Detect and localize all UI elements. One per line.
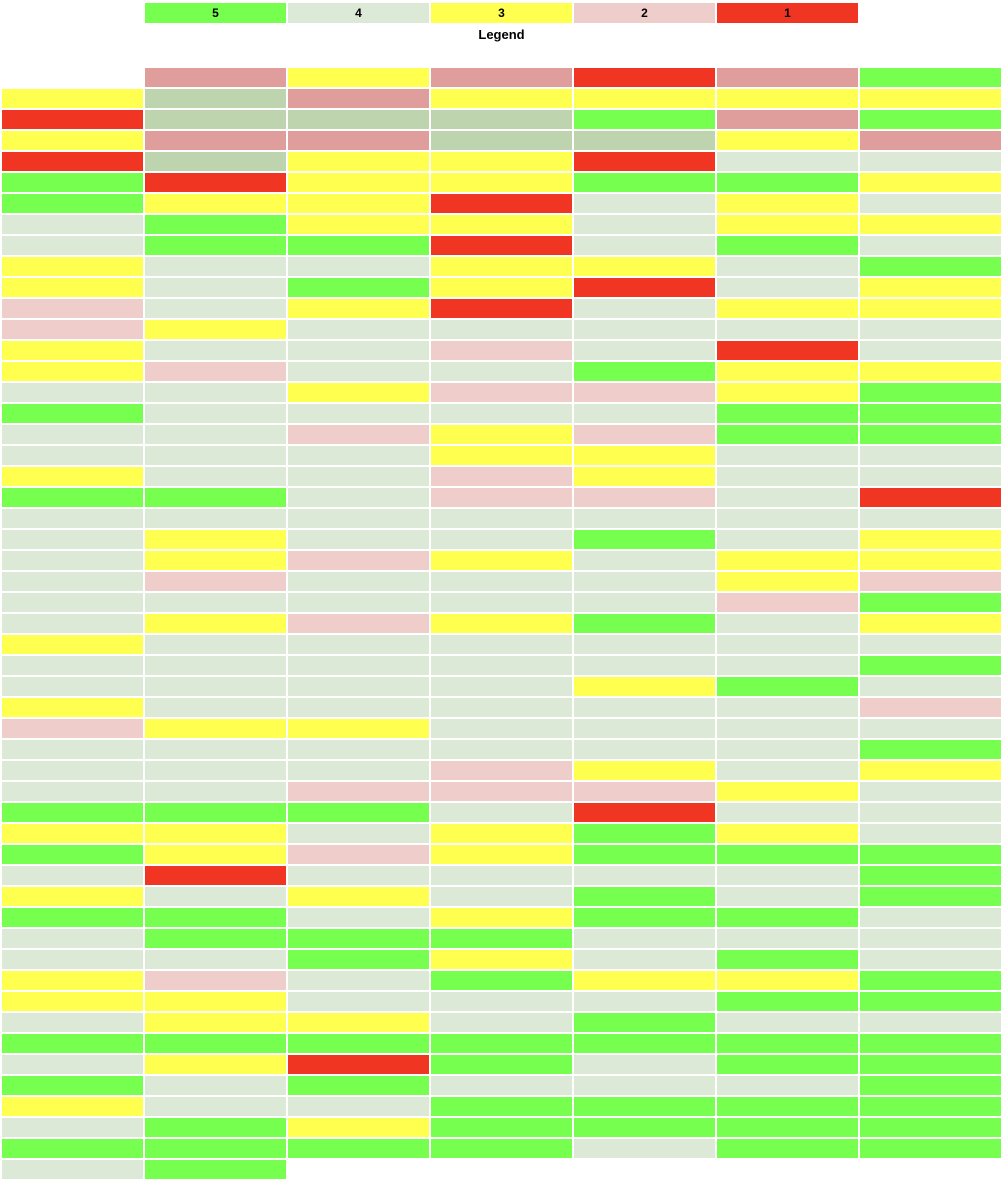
row 6 xyxy=(2,173,1001,192)
row 22 xyxy=(2,509,1001,528)
row 23 xyxy=(2,530,1001,549)
legend swatches 5 to 1 xyxy=(145,3,858,23)
row 30 xyxy=(2,677,1001,696)
row 3 xyxy=(2,110,1001,129)
row 32 xyxy=(2,719,1001,738)
row 50 xyxy=(2,1097,1001,1116)
row 5 xyxy=(2,152,1001,171)
row 35 xyxy=(2,782,1001,801)
row 24 xyxy=(2,551,1001,570)
row 42 xyxy=(2,929,1001,948)
row 16 xyxy=(2,383,1001,402)
row 26 xyxy=(2,593,1001,612)
row 48 xyxy=(2,1055,1001,1074)
row 44 xyxy=(2,971,1001,990)
row 33 xyxy=(2,740,1001,759)
row 25 xyxy=(2,572,1001,591)
row 41 xyxy=(2,908,1001,927)
row 9 xyxy=(2,236,1001,255)
row 15 xyxy=(2,362,1001,381)
row 28 xyxy=(2,635,1001,654)
row 27 xyxy=(2,614,1001,633)
row 45 xyxy=(2,992,1001,1011)
row 47 xyxy=(2,1034,1001,1053)
row 13 xyxy=(2,320,1001,339)
row 17 xyxy=(2,404,1001,423)
row 1 xyxy=(145,68,1001,87)
row 53 xyxy=(2,1160,286,1179)
row 2 xyxy=(2,89,1001,108)
row 14 xyxy=(2,341,1001,360)
row 7 xyxy=(2,194,1001,213)
row 38 xyxy=(2,845,1001,864)
legend swatches 5 to 1: 5 xyxy=(212,6,219,20)
row 12 xyxy=(2,299,1001,318)
row 20 xyxy=(2,467,1001,486)
row 29 xyxy=(2,656,1001,675)
row 39 xyxy=(2,866,1001,885)
legend swatches 5 to 1: 1 xyxy=(784,6,791,20)
row 11 xyxy=(2,278,1001,297)
row 40 xyxy=(2,887,1001,906)
row 8 xyxy=(2,215,1001,234)
row 49 xyxy=(2,1076,1001,1095)
row 4 xyxy=(2,131,1001,150)
legend swatches 5 to 1: 3 xyxy=(498,6,505,20)
row 36 xyxy=(2,803,1001,822)
row 10 xyxy=(2,257,1001,276)
row 46 xyxy=(2,1013,1001,1032)
row 34 xyxy=(2,761,1001,780)
row 21 xyxy=(2,488,1001,507)
row 31 xyxy=(2,698,1001,717)
row 52 xyxy=(2,1139,1001,1158)
row 18 xyxy=(2,425,1001,444)
legend xyxy=(145,3,858,42)
legend swatches 5 to 1: 4 xyxy=(355,6,362,20)
legend swatches 5 to 1: 2 xyxy=(641,6,648,20)
row 51 xyxy=(2,1118,1001,1137)
row 19 xyxy=(2,446,1001,465)
row 43 xyxy=(2,950,1001,969)
row 37 xyxy=(2,824,1001,843)
legend title: Legend xyxy=(478,27,525,42)
